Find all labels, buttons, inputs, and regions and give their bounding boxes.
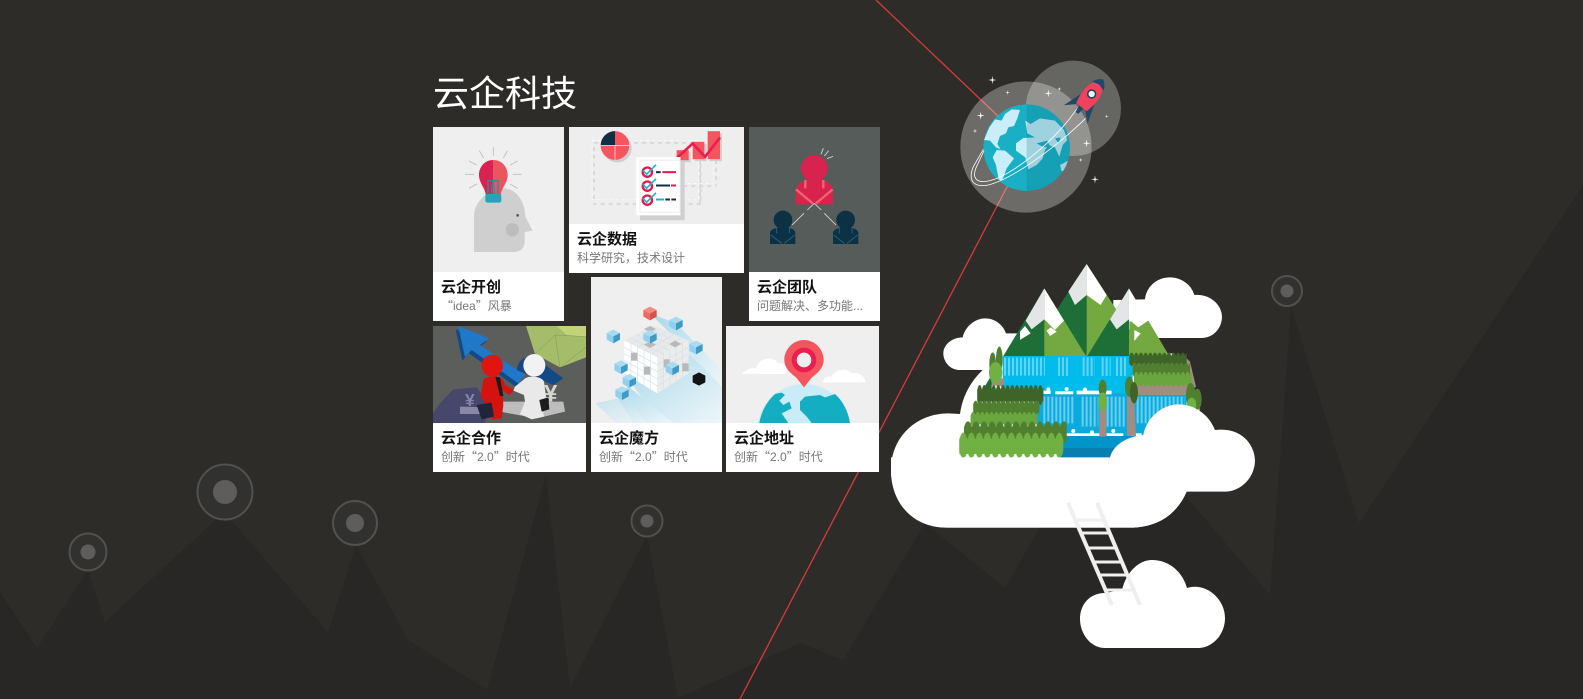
peak marker 4 xyxy=(632,506,662,536)
heading: 云企数据 xyxy=(577,228,637,249)
card: 云企魔方 xyxy=(591,277,722,472)
image: handshake figures: ¥ xyxy=(465,390,475,410)
heading: 云企开创 xyxy=(441,276,501,297)
left hedge terraces xyxy=(959,385,1067,458)
right trees xyxy=(1186,383,1202,412)
halo circles xyxy=(960,61,1121,213)
subtitle: 创新“2.0”时代 xyxy=(734,448,823,465)
dark mountains silhouette xyxy=(0,185,1583,699)
small cloud right top xyxy=(1113,277,1222,338)
peak marker 2 xyxy=(198,464,252,520)
main cloud front xyxy=(891,404,1255,528)
right hedges xyxy=(1129,353,1191,387)
heading: 云企合作 xyxy=(441,427,501,448)
ladder xyxy=(1068,503,1140,605)
rocket xyxy=(1064,70,1115,124)
floating island on clouds xyxy=(891,264,1255,528)
main cloud back xyxy=(891,353,1200,528)
card: 云企开创 xyxy=(433,127,564,321)
heading: 云企魔方 xyxy=(599,427,659,448)
icon: report with charts xyxy=(569,127,744,224)
red diagonal lines xyxy=(740,0,1008,699)
subtitle: 问题解决、多功能... xyxy=(757,299,863,313)
subtitle: 科学研究，技术设计 xyxy=(577,251,685,265)
image: handshake figures xyxy=(433,326,586,423)
waterfall xyxy=(1003,356,1187,458)
card: 云企合作 xyxy=(433,326,586,472)
sparkle stars xyxy=(973,76,1109,183)
lower cloud xyxy=(1080,560,1225,648)
small cloud left xyxy=(943,318,1030,370)
heading: 云企地址 xyxy=(734,427,794,448)
title: 云企科技 xyxy=(433,65,577,117)
card: 云企地址 xyxy=(726,326,879,472)
icon: head with light bulb xyxy=(433,127,564,272)
image: handshake figures: ¥ xyxy=(544,381,558,408)
peak marker 5 xyxy=(1272,276,1302,306)
left trees xyxy=(982,347,1004,392)
middle trees xyxy=(1098,377,1138,437)
globe xyxy=(983,103,1072,193)
peak marker 3 xyxy=(333,501,377,545)
globe and rocket illustration xyxy=(960,61,1121,213)
orbit trails xyxy=(971,109,1086,186)
subtitle: “idea”风暴 xyxy=(441,297,512,314)
subtitle: 创新“2.0”时代 xyxy=(441,448,530,465)
peak marker 1 xyxy=(70,534,106,570)
mountains xyxy=(1003,264,1169,356)
image: data cube xyxy=(591,277,722,423)
card: 云企团队 xyxy=(749,127,880,321)
image: map pin on globe xyxy=(726,326,879,423)
background scene xyxy=(68,0,1303,699)
heading: 云企团队 xyxy=(757,276,817,297)
icon: team hierarchy xyxy=(749,127,880,272)
card: 云企数据 xyxy=(569,127,744,273)
right cliff xyxy=(1137,357,1196,395)
foam xyxy=(1043,387,1142,436)
subtitle: 创新“2.0”时代 xyxy=(599,448,688,465)
